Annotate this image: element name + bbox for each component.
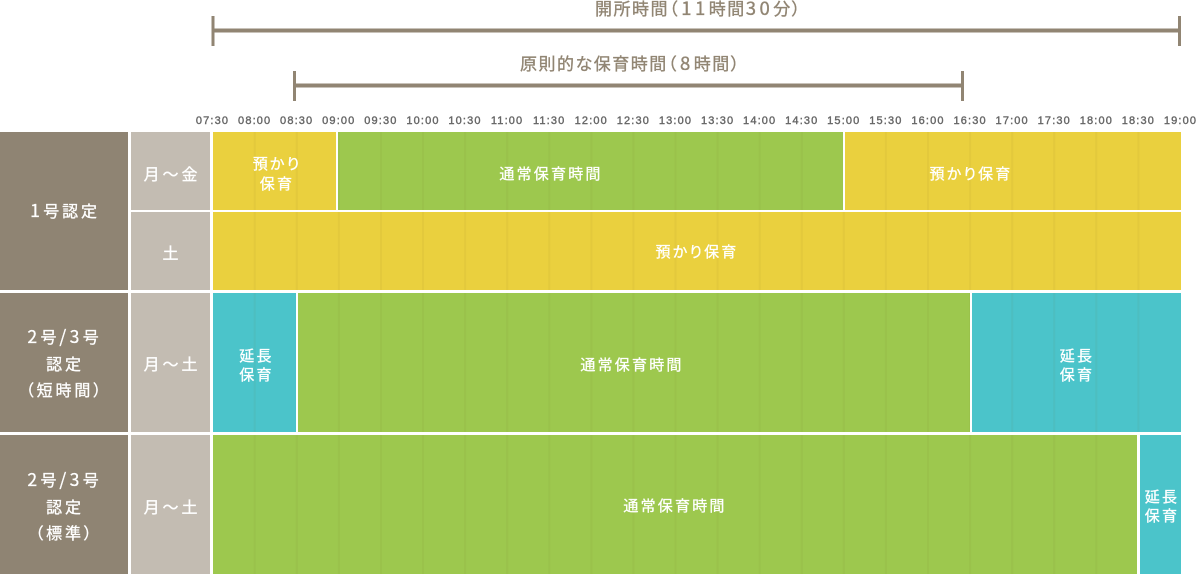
time axis labels: 07:30 — [196, 115, 229, 127]
time axis labels: 09:00 — [322, 115, 355, 127]
block label: Saturday custody: 預かり保育 — [655, 241, 739, 262]
day cell: Mon-Sat standard — [131, 435, 210, 574]
block label: extended early — [239, 345, 274, 385]
time axis labels: 19:00 — [1164, 115, 1197, 127]
category cell: type 2/3 standard: （標準） — [35, 520, 95, 544]
time axis labels: 10:30 — [448, 115, 482, 127]
category cell: type 2/3 standard: 2号/3号 — [27, 467, 102, 492]
day cell: Sat — [131, 212, 210, 290]
time axis labels: 13:30 — [701, 115, 734, 127]
time axis labels: 16:30 — [953, 115, 987, 127]
category cell: type 2/3 short hours: 2号/3号 — [27, 324, 102, 349]
time axis labels: 12:00 — [575, 115, 608, 127]
category cell: type 1 — [0, 132, 128, 290]
block label: early custody: 保育 — [260, 173, 294, 194]
day cell: Sat: 土 — [163, 240, 181, 264]
time axis labels: 12:30 — [617, 115, 650, 127]
time axis labels: 11:30 — [533, 115, 565, 127]
time axis labels: 13:00 — [659, 115, 692, 127]
block label: extended late — [1060, 345, 1094, 385]
bracket: opening hours — [212, 16, 1181, 46]
block label: early custody: 預かり — [253, 153, 301, 174]
time axis labels: 18:00 — [1080, 115, 1113, 127]
day cell: Mon-Sat standard: 月～土 — [144, 494, 200, 518]
block label: regular hours row 4: 通常保育時間 — [623, 495, 727, 516]
block label: extended early: 保育 — [239, 364, 274, 385]
day cell: Mon-Fri: 月～金 — [144, 161, 200, 185]
time axis labels: 15:00 — [827, 115, 860, 127]
time axis labels: 14:00 — [743, 115, 776, 127]
category cell: type 2/3 short hours: （短時間） — [26, 377, 104, 401]
category cell: type 2/3 short hours — [0, 293, 128, 432]
time axis labels: 11:00 — [491, 115, 523, 127]
time axis labels: 08:30 — [280, 115, 313, 127]
block label: extended late: 保育 — [1060, 364, 1094, 385]
category cell: type 1: 1号認定 — [30, 198, 100, 223]
block separators — [296, 132, 1140, 574]
block label: late custody: 預かり保育 — [929, 163, 1013, 184]
day cell: Mon-Sat short — [131, 293, 210, 432]
time axis labels: 08:00 — [238, 115, 271, 127]
half-hour grid lines — [255, 132, 1138, 574]
time axis labels: 17:00 — [996, 115, 1029, 127]
block label: regular hours row 3: 通常保育時間 — [580, 354, 684, 375]
time axis labels: 16:00 — [911, 115, 945, 127]
category cell: type 2/3 short hours: 認定 — [46, 351, 84, 375]
day cell: Mon-Fri — [131, 132, 210, 210]
time axis labels: 17:30 — [1038, 115, 1071, 127]
day cell: Mon-Sat short: 月～土 — [144, 351, 200, 375]
block label: regular hours row 1: 通常保育時間 — [499, 163, 603, 184]
time axis labels: 10:00 — [406, 115, 440, 127]
heading: standard childcare hours: 原則的な保育時間（8時間） — [520, 50, 743, 76]
bracket: standard childcare hours — [293, 71, 964, 101]
block label: extended last: 保育 — [1145, 505, 1179, 526]
time axis labels — [196, 115, 1197, 127]
block label: extended last — [1145, 486, 1179, 526]
block label: extended late: 延長 — [1060, 345, 1094, 366]
block label: extended last: 延長 — [1145, 486, 1179, 507]
time axis labels: 18:30 — [1122, 115, 1155, 127]
schedule block backgrounds — [213, 132, 1181, 574]
time axis labels: 14:30 — [785, 115, 818, 127]
category cell: type 2/3 standard — [0, 435, 128, 574]
block label: early custody — [253, 153, 301, 194]
category cell: type 2/3 standard: 認定 — [46, 494, 84, 518]
time axis labels: 15:30 — [869, 115, 903, 127]
time axis labels: 09:30 — [364, 115, 398, 127]
block label: extended early: 延長 — [239, 345, 274, 366]
